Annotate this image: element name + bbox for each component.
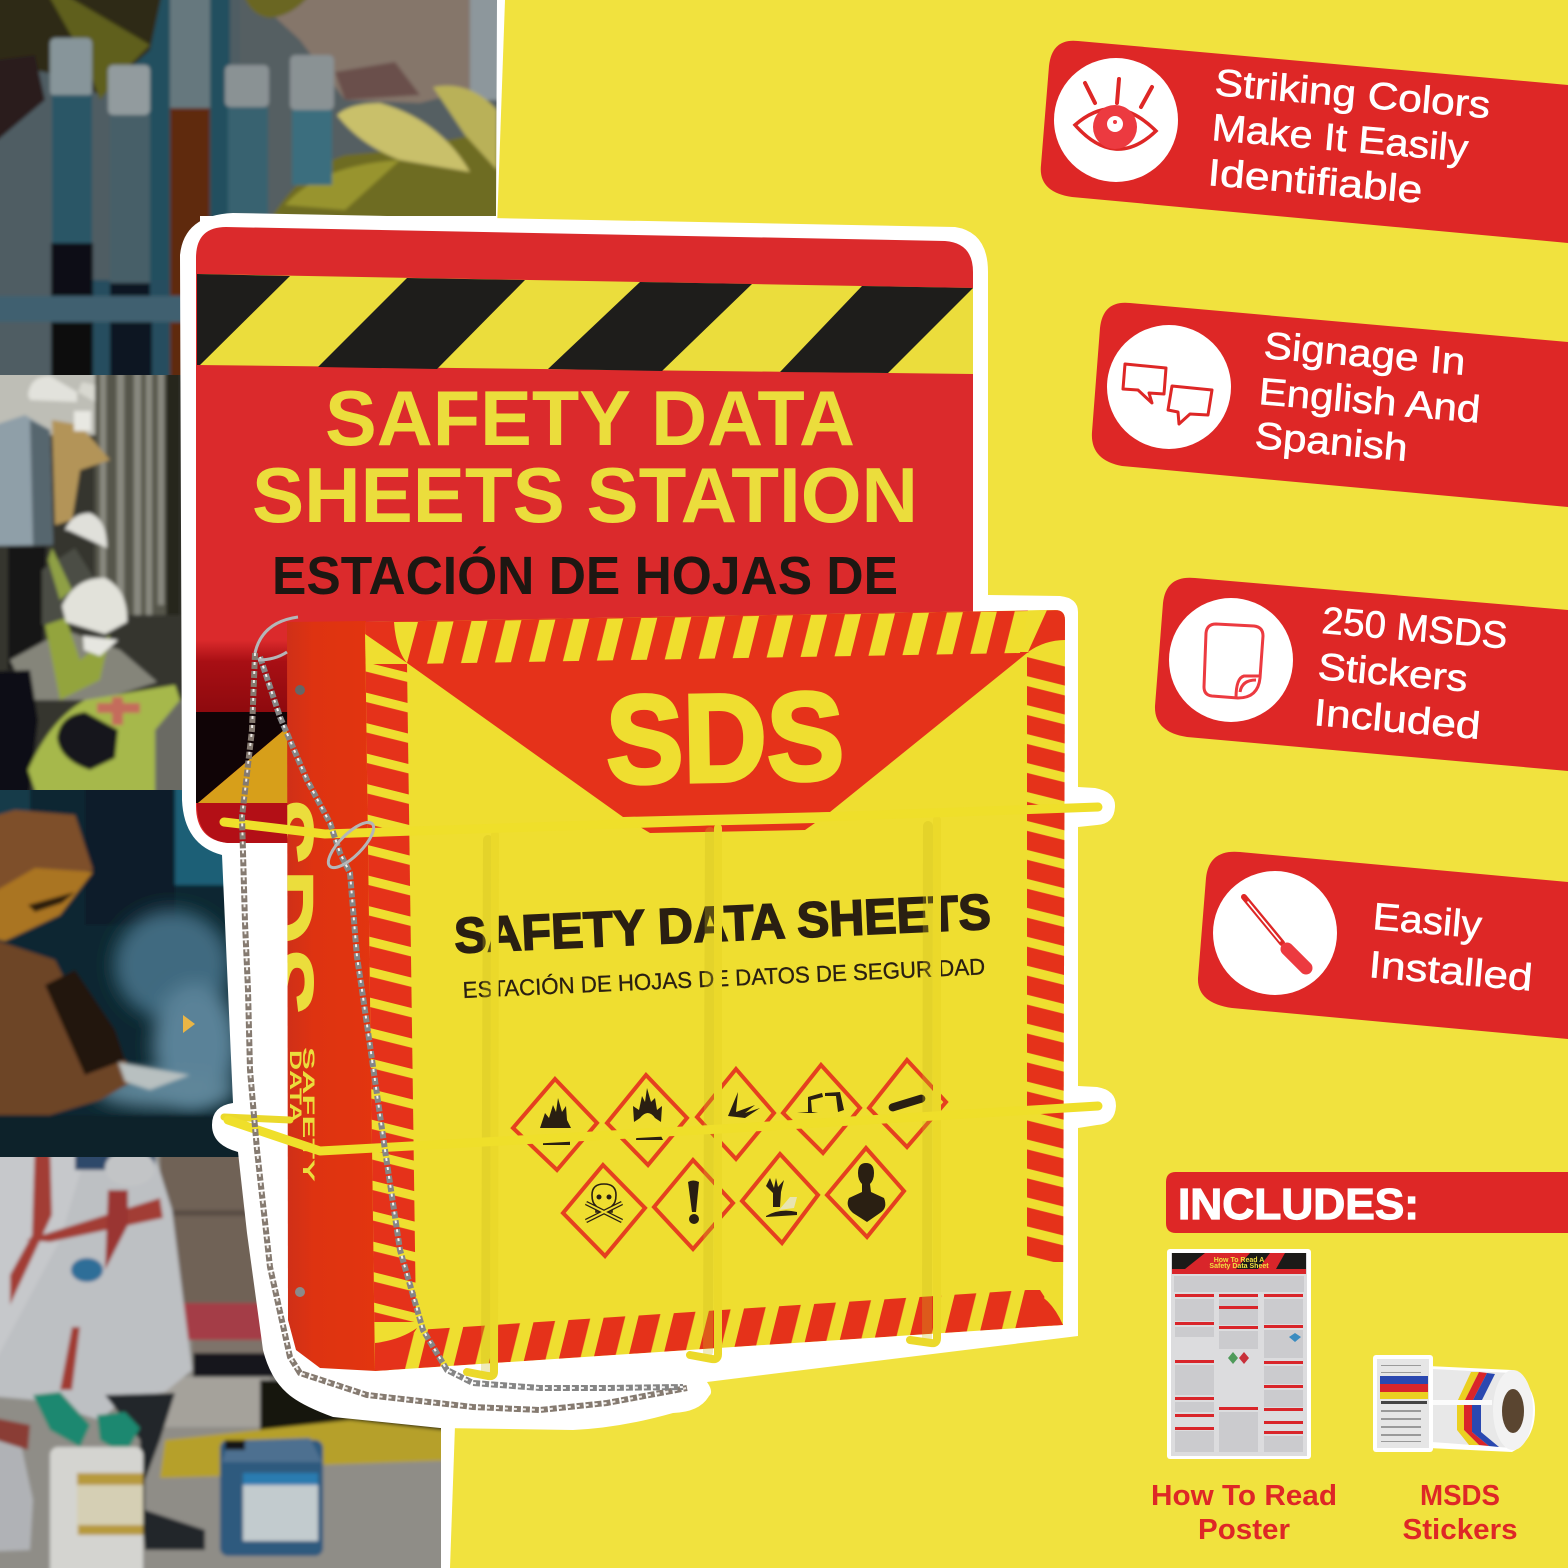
- badge text: [1312, 600, 1509, 748]
- badge: striking colors: [1041, 41, 1568, 243]
- icon: gas cylinder: [888, 1094, 926, 1112]
- stickers caption: [1402, 1480, 1518, 1546]
- chevron lower sliver: [640, 823, 815, 833]
- binder spine: DATA: [286, 1050, 305, 1123]
- icon: corrosion: [797, 1092, 844, 1113]
- badge text: [1206, 62, 1492, 212]
- badge: easily installed: [1198, 852, 1568, 1039]
- chain rings: [255, 617, 380, 874]
- right stripes: [1027, 653, 1065, 1262]
- binder: [230, 610, 1065, 1372]
- badge text: 250 MSDS: [1320, 600, 1509, 658]
- badge text: Striking Colors: [1213, 62, 1492, 127]
- badge text: Stickers: [1316, 646, 1469, 701]
- badge text: [1367, 896, 1534, 1000]
- badge: signage in english and spanish: [1092, 303, 1568, 507]
- badge text: [1253, 325, 1482, 470]
- badge: stickers included: [1155, 578, 1568, 771]
- icon: exclamation dot: [689, 1214, 699, 1224]
- icon: fish: [779, 1197, 797, 1210]
- chain right: [260, 657, 683, 1388]
- includes banner: [1166, 1172, 1568, 1233]
- badge text: Identifiable: [1206, 152, 1424, 212]
- hazard stripe band: [197, 274, 973, 374]
- top right corner swirl: [1020, 610, 1065, 660]
- badge text: Signage In: [1262, 325, 1467, 384]
- left stripes: [365, 664, 416, 1322]
- photo: lab test tubes: [0, 0, 497, 375]
- sign board: SHEETS STATION: [252, 451, 918, 539]
- cover subheading: ESTACIÓN DE HOJAS DE DATOS DE SEGURIDAD: [462, 953, 986, 1003]
- icon: explosion: [728, 1092, 760, 1118]
- badge text: Installed: [1367, 944, 1534, 1000]
- photo: welder: [0, 790, 239, 1157]
- poster caption: Poster: [1198, 1514, 1290, 1546]
- white strip beside photos: [0, 0, 505, 1568]
- sign spanish title: ESTACIÓN DE HOJAS DE: [272, 546, 898, 606]
- icon: flame: [540, 1098, 571, 1145]
- icon: speech bubbles: [1123, 364, 1212, 424]
- binder spine: SDS: [230, 796, 332, 1018]
- photo: workers in helmets: [0, 375, 182, 790]
- badge text: Included: [1312, 692, 1482, 748]
- icon: dead tree and fish: [766, 1178, 797, 1217]
- top left corner swirl: [365, 622, 418, 664]
- sign title: SAFETY DATA: [325, 374, 855, 462]
- icon: eye: [1075, 79, 1156, 149]
- badge text: Make It Easily: [1210, 107, 1470, 170]
- sign board: [196, 227, 973, 843]
- chain left: [242, 653, 687, 1410]
- binder cover: [365, 610, 1065, 1371]
- poster caption: [1151, 1480, 1337, 1546]
- top stripes: [410, 611, 1030, 664]
- icon: screwdriver: [1244, 897, 1306, 968]
- bottom corners: [375, 1298, 1063, 1371]
- white product outline: [180, 213, 1116, 1430]
- photo: hazmat worker: [0, 1140, 470, 1568]
- icon: exclamation mark: [688, 1180, 699, 1212]
- cover heading: SAFETY DATA SHEETS: [453, 884, 992, 964]
- icon: health hazard: [848, 1163, 885, 1222]
- SDS chevron: [365, 610, 1065, 817]
- badge text: Easily: [1371, 896, 1483, 947]
- sticker roll thumbnail: [1373, 1355, 1535, 1452]
- badge text: English And: [1257, 371, 1482, 432]
- binder spine: SAFETY: [299, 1047, 318, 1183]
- stickers caption: MSDS: [1420, 1480, 1500, 1512]
- sign shadow and lower stripe: [196, 640, 290, 843]
- binder spine: [287, 621, 375, 1371]
- hazard pictograms: [540, 1088, 926, 1224]
- icon: flame over circle: [633, 1088, 663, 1140]
- wire rack: [224, 807, 1098, 1376]
- includes banner: INCLUDES:: [1178, 1180, 1419, 1229]
- poster caption: How To Read: [1151, 1480, 1337, 1512]
- badge text: Spanish: [1253, 415, 1409, 470]
- SDS letters: SDS: [605, 667, 845, 810]
- poster thumbnail: [1167, 1249, 1311, 1459]
- bottom stripes: [375, 1290, 1063, 1371]
- stickers caption: Stickers: [1402, 1514, 1518, 1546]
- poster thumbnail: How To Read A: [1214, 1257, 1264, 1264]
- poster thumbnail: Safety Data Sheet: [1209, 1263, 1269, 1270]
- hazard diamonds: [513, 1060, 946, 1256]
- icon: sticker sheet: [1204, 624, 1263, 698]
- play arrow: [183, 1015, 195, 1033]
- icon: skull and crossbones: [586, 1184, 622, 1221]
